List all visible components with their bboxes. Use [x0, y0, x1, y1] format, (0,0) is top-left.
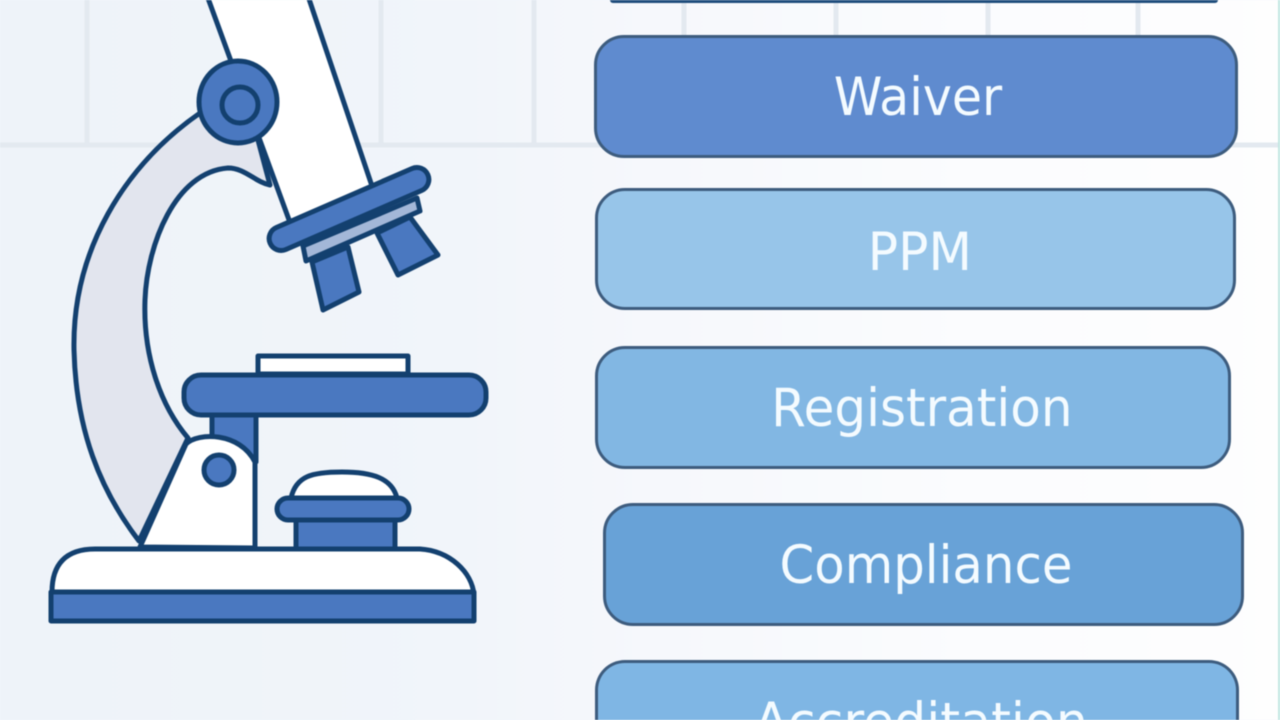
button: Waiver	[594, 35, 1238, 158]
button: Registration	[595, 346, 1231, 469]
focus knob	[199, 61, 277, 143]
slide	[258, 356, 408, 374]
base	[51, 549, 474, 621]
pillar joint	[140, 437, 255, 548]
pillar screw	[204, 455, 234, 485]
light source	[277, 472, 409, 550]
icon: microscope	[51, 0, 486, 621]
button: Registration: Registration	[771, 378, 1072, 439]
nosepiece	[265, 164, 433, 254]
stage support	[212, 412, 256, 462]
button: PPM	[595, 188, 1236, 310]
microscope tube	[205, 0, 374, 228]
button: Accreditation	[595, 660, 1239, 720]
microscope arm	[74, 110, 270, 541]
button: top partial	[610, 0, 1218, 3]
button: PPM: PPM	[867, 222, 972, 283]
objective lenses	[312, 217, 438, 310]
stage	[184, 375, 486, 415]
button: Compliance: Compliance	[779, 535, 1072, 596]
button: Compliance	[603, 503, 1244, 626]
button: Waiver: Waiver	[834, 67, 1002, 128]
lens plate	[303, 198, 420, 261]
